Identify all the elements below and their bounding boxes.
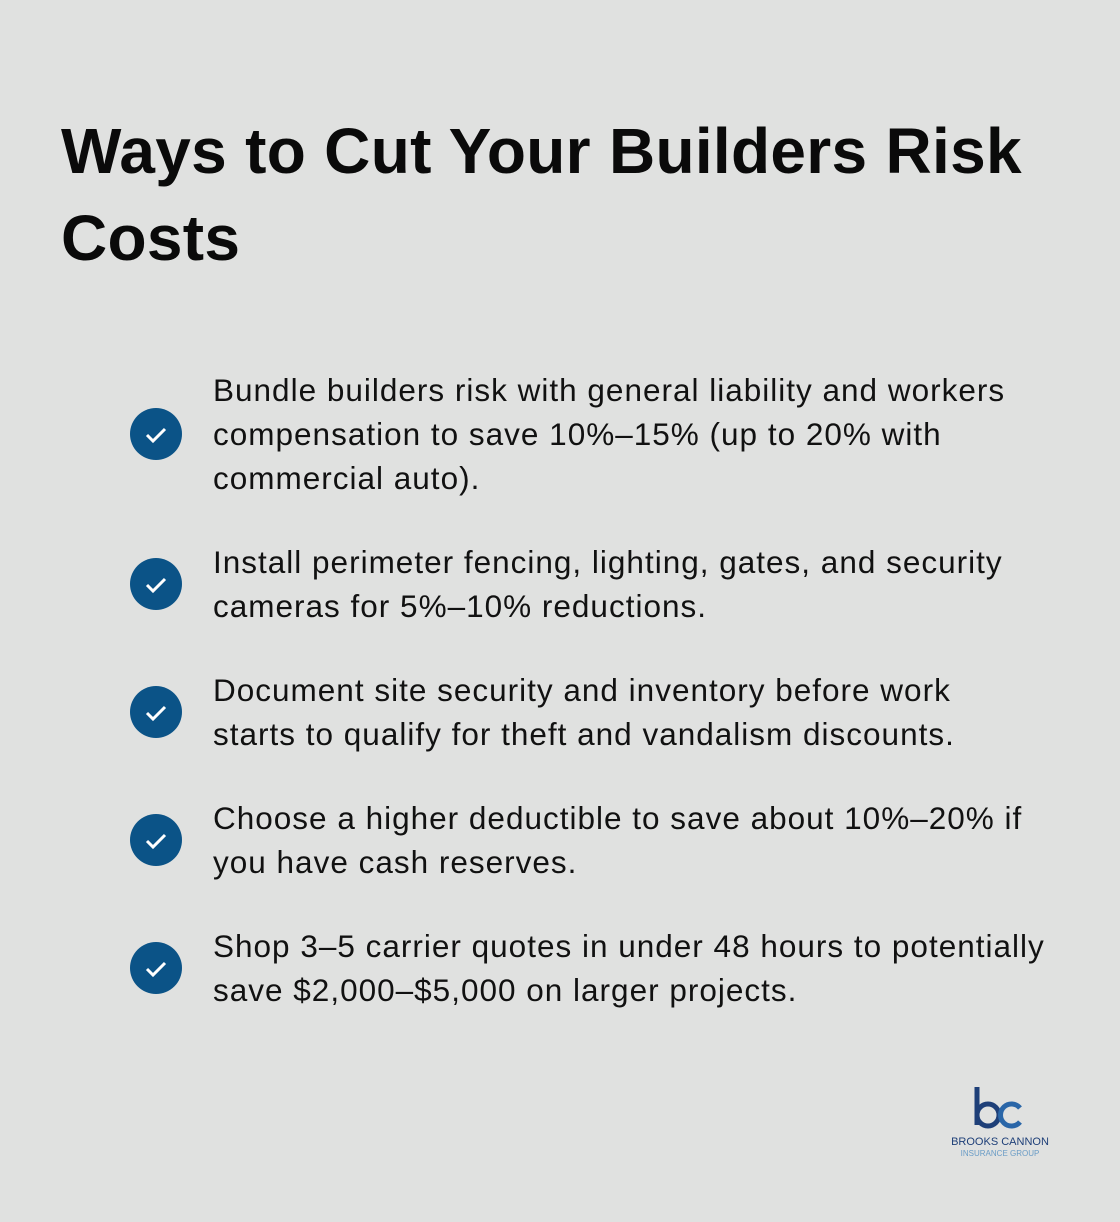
icon: check xyxy=(130,408,182,460)
icon: check xyxy=(130,942,182,994)
text 4: you have cash reserves. xyxy=(213,844,577,880)
text 3 xyxy=(213,672,955,752)
text 4 xyxy=(213,800,1022,880)
item 1 xyxy=(130,372,1005,496)
logo: BROOKS CANNON xyxy=(951,1136,1049,1148)
text 3: Document site security and inventory before work xyxy=(213,672,951,708)
text 5: Shop 3–5 carrier quotes in under 48 hours to potentially xyxy=(213,928,1045,964)
icon: check xyxy=(130,814,182,866)
text 1: commercial auto). xyxy=(213,460,480,496)
title: Ways to Cut Your Builders Risk xyxy=(61,115,1022,187)
text 1: compensation to save 10%–15% (up to 20% with xyxy=(213,416,942,452)
text 2: Install perimeter fencing, lighting, gates, and security xyxy=(213,544,1003,580)
text 4: Choose a higher deductible to save about 10%–20% if xyxy=(213,800,1022,836)
text 2: cameras for 5%–10% reductions. xyxy=(213,588,707,624)
text 2 xyxy=(213,544,1003,624)
logo xyxy=(951,1087,1049,1158)
text 5 xyxy=(213,928,1045,1008)
text 1 xyxy=(213,372,1005,496)
text 3: starts to qualify for theft and vandalism discounts. xyxy=(213,716,955,752)
item 4 xyxy=(130,800,1022,880)
logo: INSURANCE GROUP xyxy=(961,1149,1039,1158)
icon: check xyxy=(130,558,182,610)
text 1: Bundle builders risk with general liability and workers xyxy=(213,372,1005,408)
text 5: save $2,000–$5,000 on larger projects. xyxy=(213,972,797,1008)
title: Costs xyxy=(61,202,240,274)
icon: check xyxy=(130,686,182,738)
item 5 xyxy=(130,928,1045,1008)
item 2 xyxy=(130,544,1003,624)
item 3 xyxy=(130,672,955,752)
title xyxy=(61,115,1022,274)
